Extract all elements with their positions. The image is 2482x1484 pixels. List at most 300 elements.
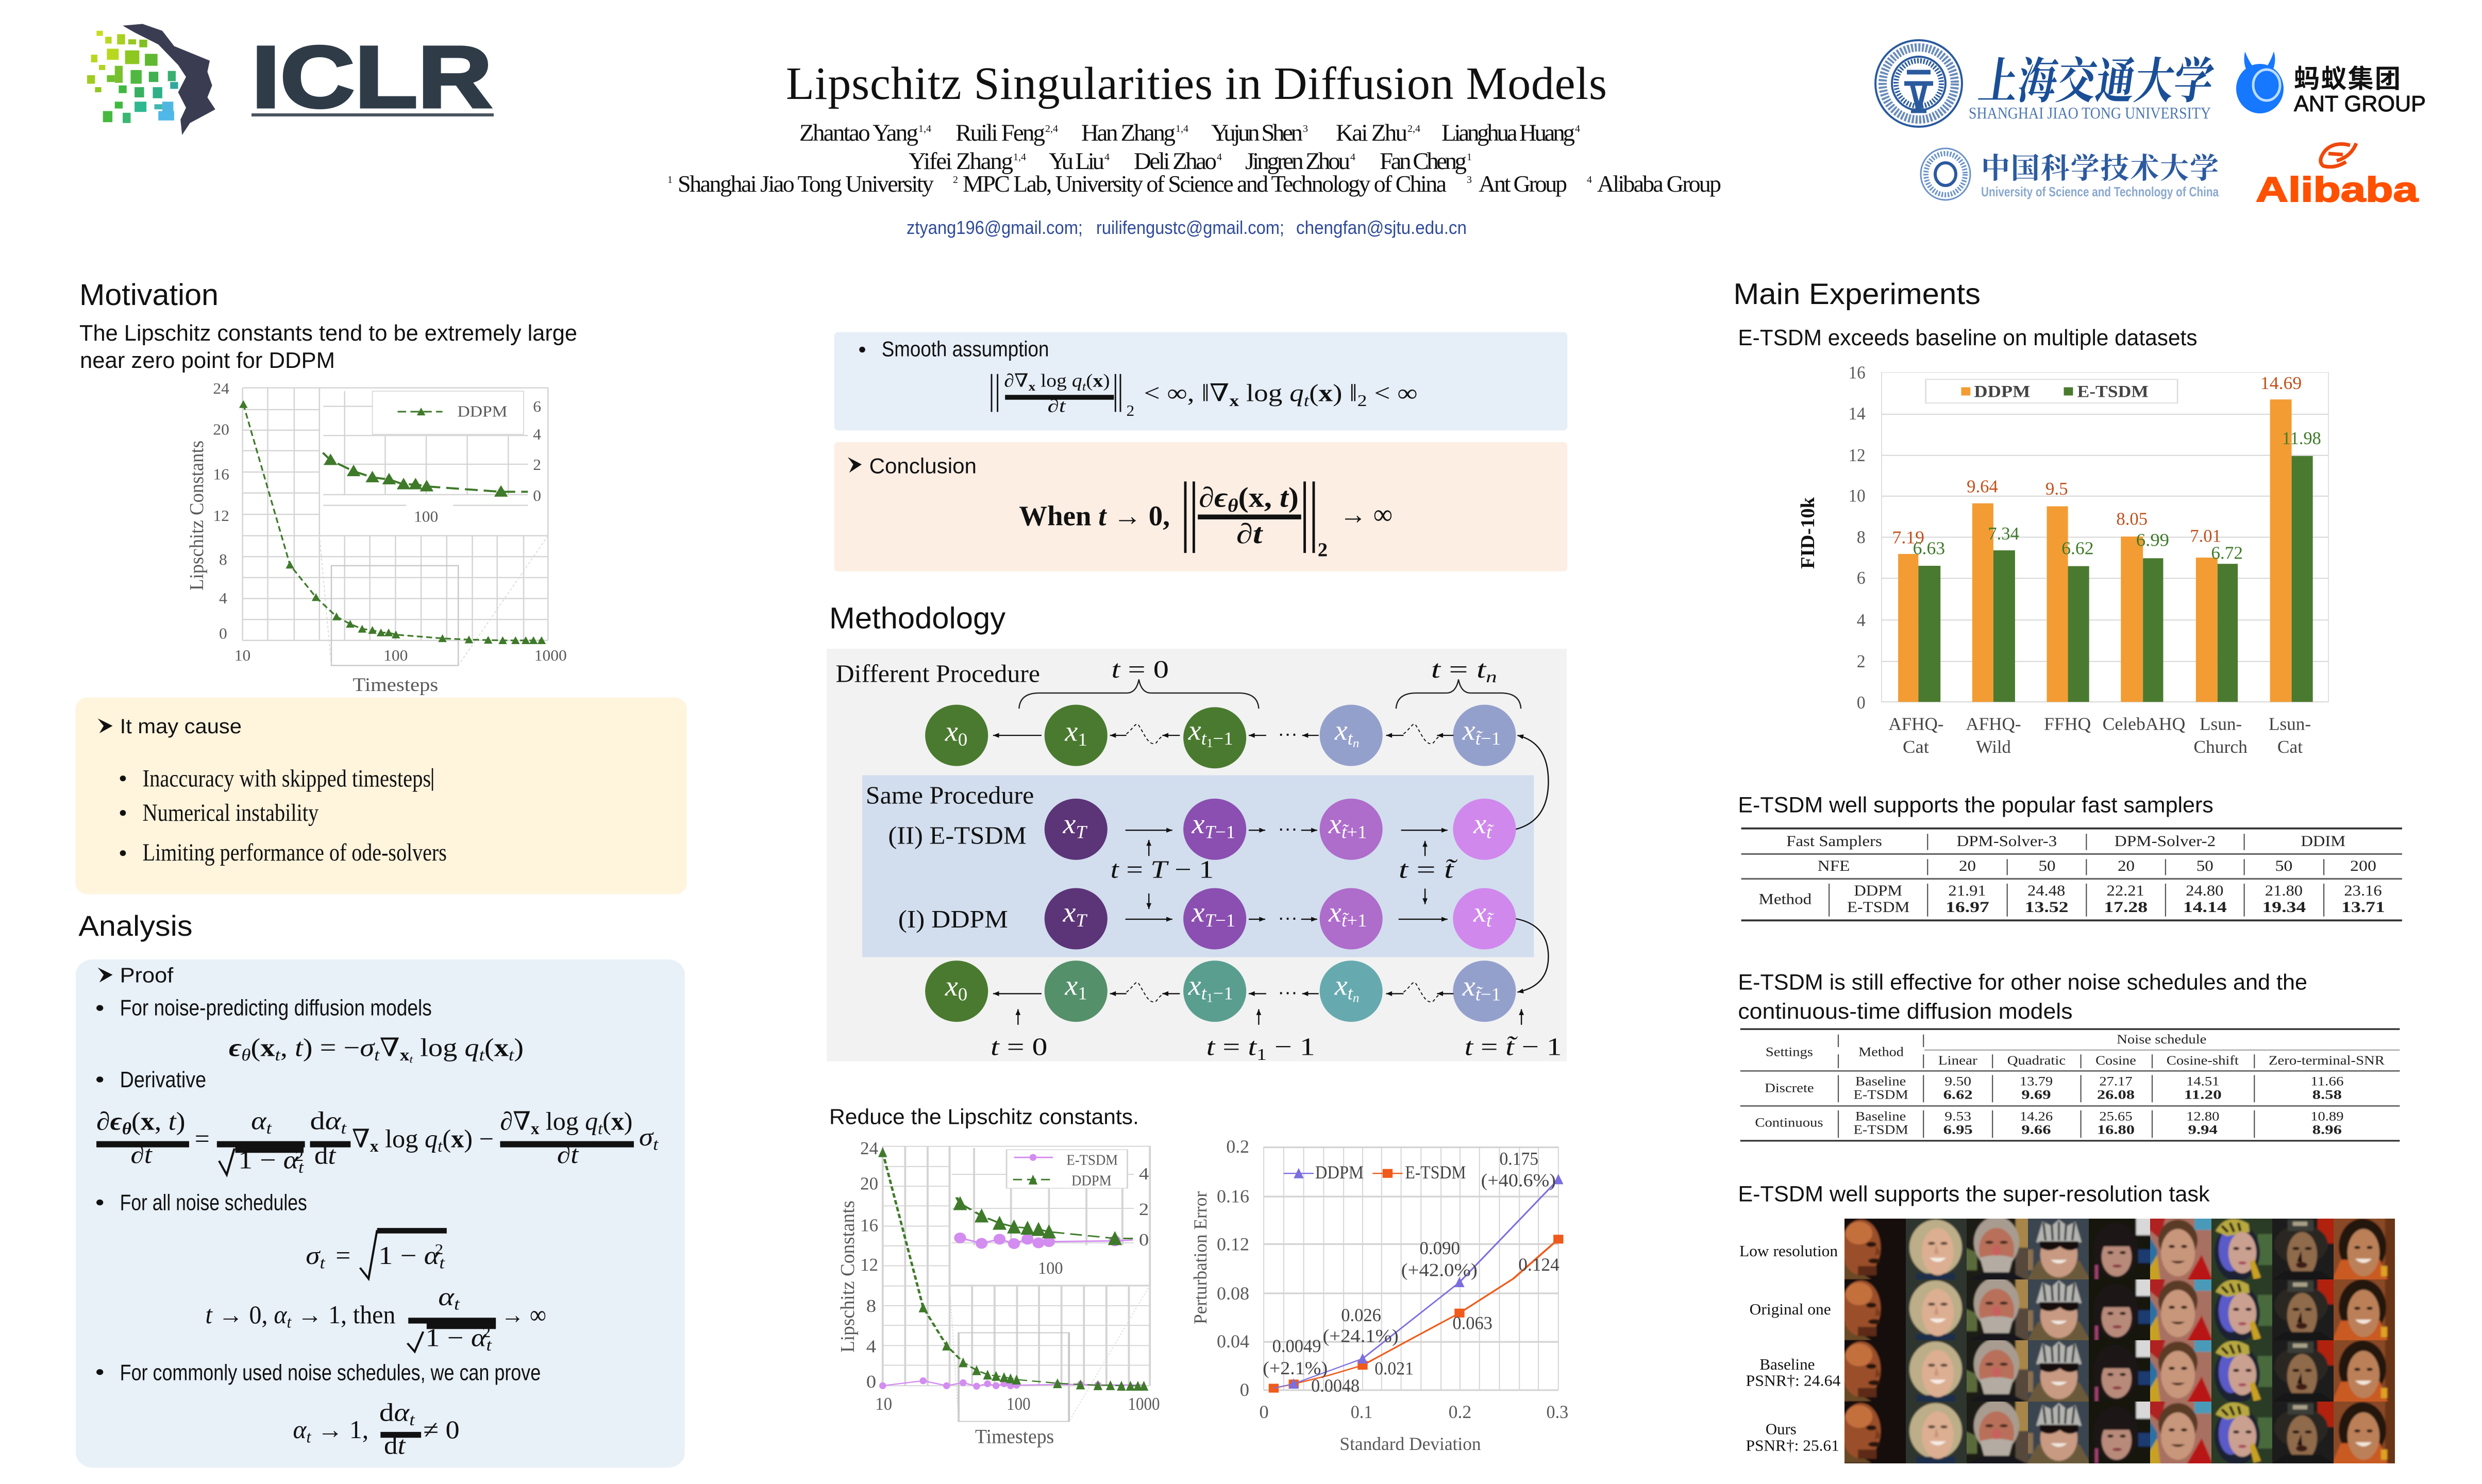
icon: Alibaba swirl xyxy=(2321,143,2356,167)
table: noise schedules: Settings xyxy=(1766,1045,1813,1059)
data labels: (+42.0%) xyxy=(1401,1259,1478,1280)
affiliations: Alibaba Group xyxy=(1597,171,1721,197)
DDPM series xyxy=(243,404,542,640)
panel: smooth assumption: x) ‖ xyxy=(1319,380,1354,407)
authors: 1,4 xyxy=(1176,123,1188,134)
subheading: noise schedules: continuous-time diffusion models xyxy=(1738,999,2073,1023)
authors: 4 xyxy=(1350,151,1355,163)
node row: lower different procedure: n xyxy=(1353,991,1359,1005)
data labels: 0.090 xyxy=(1419,1237,1460,1258)
formula: limit: 1 − α xyxy=(425,1323,487,1352)
proof box xyxy=(76,959,685,1468)
affiliations: 2 xyxy=(953,174,958,185)
y axis ticks: 16 xyxy=(1849,363,1866,383)
x axis categories: Church xyxy=(2193,737,2248,757)
panel: smooth assumption: log xyxy=(1035,370,1072,391)
panel title: It may cause xyxy=(120,715,242,738)
formula: conclusion: t) xyxy=(1280,482,1298,513)
legend xyxy=(373,391,524,434)
legend: DDPM xyxy=(1974,382,2030,401)
table: noise schedules: 9.50 xyxy=(1944,1074,1971,1089)
table: fast samplers: Fast Samplers xyxy=(1786,833,1882,849)
axis labels: 0.2 xyxy=(1226,1136,1249,1157)
panel: smooth assumption: ( xyxy=(1086,370,1093,391)
node row: lower different procedure: x xyxy=(945,971,958,1002)
proof title: Proof xyxy=(120,964,174,987)
formula: noise prediction: t xyxy=(374,1045,380,1065)
diagram labels: 1 xyxy=(1256,1045,1267,1064)
axis labels: 4 xyxy=(219,589,227,607)
x axis categories: Lsun- xyxy=(2269,715,2311,734)
formula: conclusion: When t → 0, xyxy=(1019,501,1170,532)
table: noise schedules: 14.26 xyxy=(2020,1109,2053,1124)
table: noise schedules: 8.58 xyxy=(2312,1088,2342,1102)
y axis title: FID-10k: FID-10k xyxy=(1797,497,1819,569)
x axis categories: Cat xyxy=(1903,737,1929,757)
bullet points: Derivative xyxy=(120,1067,206,1092)
panel: it may cause xyxy=(75,698,687,894)
inset panel: 100 xyxy=(414,508,438,525)
node row: DDPM: −1 xyxy=(1215,910,1235,931)
axis labels xyxy=(213,379,567,696)
panel: smooth assumption: Smooth assumption xyxy=(882,337,1049,361)
authors: 1,4 xyxy=(918,123,931,134)
data labels: (+24.1%) xyxy=(1322,1325,1399,1346)
table: noise schedules: Linear xyxy=(1938,1053,1977,1068)
formula: noise prediction: t) = −σ xyxy=(295,1034,375,1062)
table: noise schedules xyxy=(1740,1029,2400,1141)
formula: noise prediction: , xyxy=(280,1034,295,1062)
node row: upper different procedure: 1 xyxy=(1078,729,1087,750)
formula: derivative: α xyxy=(251,1106,267,1135)
panel: smooth assumption: t xyxy=(1082,380,1086,394)
node row: upper different procedure: t xyxy=(1201,728,1207,749)
emails: chengfan@sjtu.edu.cn xyxy=(1296,217,1467,238)
formula: limit: t xyxy=(454,1294,460,1313)
affiliations: 4 xyxy=(1587,174,1592,185)
authors: Jingren Zhou xyxy=(1245,148,1350,175)
authors: 2,4 xyxy=(1407,123,1420,134)
table: fast samplers: 13.52 xyxy=(2025,899,2068,916)
text block: Lipschitz statement: The Lipschitz constants tend to be extremely large xyxy=(79,321,577,346)
formula: limit: t → 0, α xyxy=(205,1301,290,1329)
chart: perturbation error: 0.124 xyxy=(1518,1254,1559,1275)
formula: conclusion xyxy=(1019,481,1393,561)
node row: lower different procedure: x xyxy=(1065,970,1078,1001)
node row: lower different procedure: 0 xyxy=(958,984,967,1004)
legend xyxy=(1007,1150,1128,1189)
section: reduce the Lipschitz constants xyxy=(829,1105,1568,1454)
data labels: 0.175 xyxy=(1499,1148,1538,1169)
axis labels: 12 xyxy=(213,507,229,525)
y axis ticks: 2 xyxy=(1857,652,1866,671)
formula: noise prediction: θ xyxy=(241,1045,251,1065)
text: 0.3 xyxy=(1547,1401,1568,1422)
bullet points: For commonly used noise schedules, we can prove xyxy=(120,1360,541,1385)
node row: DDPM: t̃ xyxy=(1341,910,1349,931)
table: noise schedules: 6.62 xyxy=(1943,1088,1973,1102)
formula: sigma xyxy=(306,1228,447,1279)
inset panel: 0 xyxy=(533,486,541,504)
formula: derivative: t xyxy=(598,1119,603,1138)
table: noise schedules: 14.51 xyxy=(2186,1074,2219,1089)
legend xyxy=(1926,379,2177,403)
y axis title: Lipschitz constants: Lipschitz Constants xyxy=(837,1201,859,1353)
heading: Methodology: Methodology xyxy=(829,601,1005,635)
x axis categories: Wild xyxy=(1976,737,2011,757)
y axis ticks: 8 xyxy=(1857,528,1866,547)
section: main experiments: Low resolution xyxy=(1739,1242,1838,1260)
formula: conclusion: (x, xyxy=(1238,482,1280,513)
axis labels: 8 xyxy=(219,551,227,568)
table: fast samplers: 13.71 xyxy=(2341,899,2385,916)
formula: noise prediction: ϵ xyxy=(229,1034,242,1062)
panel: conclusion: Conclusion xyxy=(869,454,977,478)
logo underline xyxy=(251,113,494,116)
authors: Deli Zhao xyxy=(1134,148,1217,175)
logo Chinese name: 蚂蚁集团 xyxy=(2294,64,2401,93)
node row: DDPM xyxy=(1045,888,1516,949)
section: reduce the Lipschitz constants: Reduce the Lipschitz constants. xyxy=(829,1105,1139,1129)
formula: noise prediction: t xyxy=(409,1053,413,1066)
node row: lower different procedure: t xyxy=(1348,983,1353,1004)
inset panel: 0 xyxy=(1139,1230,1149,1249)
node row: DDPM: x xyxy=(1192,897,1205,929)
axis labels: 0.16 xyxy=(1217,1186,1249,1207)
table: fast samplers: 16.97 xyxy=(1946,899,1989,916)
authors: 4 xyxy=(1575,123,1580,134)
formula: noise prediction: ∇ xyxy=(379,1034,400,1062)
section: main experiments xyxy=(1733,277,2402,1467)
y axis ticks: 4 xyxy=(1857,611,1866,630)
table: noise schedules: 26.08 xyxy=(2097,1088,2135,1102)
authors xyxy=(799,120,1580,175)
formula: derivative: = xyxy=(195,1125,210,1153)
diagram labels xyxy=(836,655,1562,1064)
y axis ticks: 12 xyxy=(1849,446,1866,465)
same procedure band xyxy=(862,775,1534,957)
data labels: 0.0048 xyxy=(1311,1375,1360,1396)
panel: conclusion xyxy=(834,442,1567,571)
node row: lower different procedure: −1 xyxy=(1213,983,1233,1004)
formula: sigma: 2 xyxy=(435,1241,443,1258)
panel: analysis xyxy=(76,910,685,1468)
table: fast samplers: Method xyxy=(1759,891,1812,907)
bullet list: Numerical instability xyxy=(143,799,319,827)
logo Chinese name: 中国科学技术大学 xyxy=(1981,153,2219,185)
table: noise schedules: 25.65 xyxy=(2099,1109,2133,1124)
table: noise schedules: 10.89 xyxy=(2310,1109,2344,1124)
x axis categories: AFHQ- xyxy=(1966,715,2021,734)
formula: derivative: x xyxy=(531,1119,540,1138)
affiliations: MPC Lab, University of Science and Technology of China xyxy=(963,171,1447,197)
formula: alpha derivative: α xyxy=(293,1415,307,1444)
axis labels: 0.1 xyxy=(1351,1401,1372,1422)
authors: Yifei Zhang xyxy=(909,148,1013,175)
node row: lower different procedure: −1 xyxy=(1481,984,1501,1004)
node row: DDPM: t̃ xyxy=(1486,910,1494,931)
x axis categories: Lsun- xyxy=(2200,715,2242,734)
logo English name: University of Science and Technology of China xyxy=(1981,184,2219,199)
axis labels: 16 xyxy=(860,1216,878,1235)
formula: sigma: σ xyxy=(306,1241,321,1270)
data labels: 0.063 xyxy=(1452,1312,1492,1333)
formula: conclusion: θ xyxy=(1228,495,1238,516)
formula: conclusion: 2 xyxy=(1318,539,1328,561)
table: noise schedules: 27.17 xyxy=(2099,1074,2133,1089)
bullet points xyxy=(96,996,541,1385)
node row: upper different procedure: 0 xyxy=(958,729,967,750)
node row: upper different procedure: 1 xyxy=(1206,736,1213,750)
panel: smooth assumption: log xyxy=(1239,380,1289,407)
table: noise schedules: 6.95 xyxy=(1943,1123,1973,1137)
formula: derivative: ( xyxy=(442,1125,451,1153)
table: fast samplers: 21.91 xyxy=(1948,882,1986,899)
formula: derivative: x) xyxy=(611,1107,634,1136)
formula: limit: 2 xyxy=(482,1324,491,1340)
formula: derivative: ∂ϵ xyxy=(96,1107,123,1136)
E-TSDM series xyxy=(1273,1239,1558,1388)
formula: noise prediction: t xyxy=(509,1045,514,1065)
E-TSDM values: 6.62 xyxy=(2061,539,2094,559)
formula: conclusion: ∂t xyxy=(1236,519,1263,550)
axis labels: 8 xyxy=(866,1296,876,1316)
table: noise schedules: 11.66 xyxy=(2310,1074,2344,1089)
table: fast samplers: 19.34 xyxy=(2262,899,2306,916)
formula: derivative: log xyxy=(539,1107,585,1136)
node row: upper different procedure: x xyxy=(1335,715,1348,746)
axis labels: 0.04 xyxy=(1217,1331,1249,1352)
formula: sigma: t xyxy=(320,1253,326,1272)
node row: upper different procedure: x xyxy=(1463,715,1475,746)
formula: derivative: ∇ xyxy=(352,1125,373,1153)
chart: Lipschitz comparison xyxy=(860,1138,1160,1447)
formula: noise prediction: x xyxy=(400,1045,410,1065)
heading: Motivation: Motivation xyxy=(79,278,219,312)
node row: DDPM: x xyxy=(1329,897,1341,929)
node row: DDPM: T xyxy=(1205,910,1217,931)
node row: E-TSDM: t̃ xyxy=(1486,822,1494,842)
panel: smooth assumption: q xyxy=(1289,380,1304,407)
node row: upper different procedure: −1 xyxy=(1213,728,1233,749)
authors: 3 xyxy=(1303,123,1308,134)
icon: ICLR head xyxy=(87,24,215,135)
E-TSDM values xyxy=(1913,429,2321,563)
table: fast samplers: 50 xyxy=(2038,857,2055,874)
data labels: (+2.1%) xyxy=(1263,1357,1328,1378)
DDPM values: 9.64 xyxy=(1967,477,1998,497)
diagram labels: Different Procedure xyxy=(836,660,1040,687)
table: noise schedules: 9.53 xyxy=(1944,1109,1971,1124)
formula: derivative: ( xyxy=(131,1107,141,1136)
formula: alpha derivative: dα xyxy=(379,1398,410,1427)
axis labels: 1000 xyxy=(534,646,567,664)
table: fast samplers: DPM-Solver-3 xyxy=(1957,833,2057,849)
image grid: super-resolution faces xyxy=(1841,1217,2397,1467)
axis labels: 0 xyxy=(866,1372,876,1392)
panel: smooth assumption: q xyxy=(1072,370,1082,391)
formula: conclusion: ∂ϵ xyxy=(1199,482,1228,513)
formula: derivative: dt xyxy=(314,1141,337,1170)
logo wordmark: ICLR xyxy=(251,28,492,126)
y axis title: Lipschitz Constants xyxy=(186,441,208,591)
affiliations: 1 xyxy=(667,174,673,185)
authors: Kai Zhu xyxy=(1336,120,1407,146)
heading: Main Experiments: Main Experiments xyxy=(1733,277,1981,311)
E-TSDM values: 6.99 xyxy=(2136,531,2169,550)
table: fast samplers: 20 xyxy=(1959,857,1976,874)
table: noise schedules: Cosine xyxy=(2095,1053,2136,1068)
legend xyxy=(1284,1161,1466,1183)
node row: upper different procedure: x xyxy=(1188,715,1201,746)
axis labels: 20 xyxy=(860,1174,878,1193)
axis labels: 24 xyxy=(860,1138,878,1158)
section: main experiments: PSNR†: 25.61 xyxy=(1746,1437,1839,1454)
chart: FID bars xyxy=(1849,363,2328,757)
logo English name: ANT GROUP xyxy=(2294,91,2426,116)
formula: noise prediction: q xyxy=(464,1034,479,1062)
bullet list xyxy=(120,765,447,866)
data labels: 0.026 xyxy=(1341,1304,1381,1325)
node row: lower different procedure: x xyxy=(1463,971,1475,1002)
legend: DDPM xyxy=(1315,1161,1364,1183)
table: noise schedules: 8.96 xyxy=(2312,1123,2342,1137)
arrow bullet xyxy=(98,718,113,733)
node row: E-TSDM: T xyxy=(1076,822,1088,842)
axis labels: 0.2 xyxy=(1449,1401,1471,1422)
affiliations xyxy=(667,171,1721,197)
inset panel: 2 xyxy=(533,456,541,474)
logo wordmark: Alibaba xyxy=(2256,170,2419,209)
chart: DDPM Lipschitz constants xyxy=(186,379,567,696)
legend: DDPM xyxy=(1071,1172,1112,1189)
table: noise schedules: Zero-terminal-SNR xyxy=(2269,1053,2385,1068)
authors: Lianghua Huang xyxy=(1441,120,1575,146)
axis labels: 12 xyxy=(860,1255,878,1275)
node row: upper different procedure: t̃ xyxy=(1475,728,1483,749)
table: fast samplers: 24.80 xyxy=(2186,882,2223,899)
formula: derivative: ∂t xyxy=(130,1140,153,1169)
DDPM series xyxy=(883,1152,1144,1386)
formula: noise prediction: log xyxy=(413,1034,464,1062)
axis labels: 0 xyxy=(1240,1379,1249,1400)
table: noise schedules: E-TSDM xyxy=(1853,1088,1908,1102)
authors: 2,4 xyxy=(1045,123,1058,134)
chart: perturbation error: E-TSDM xyxy=(1405,1161,1466,1183)
table: noise schedules: Discrete xyxy=(1765,1081,1814,1095)
axis labels xyxy=(1217,1136,1568,1454)
bullet points: For noise-predicting diffusion models xyxy=(120,996,432,1020)
formula: sigma: t xyxy=(439,1253,445,1272)
node row: DDPM: x xyxy=(1473,897,1486,929)
logo: Ant Group xyxy=(2236,52,2426,116)
formula: noise prediction: ) xyxy=(514,1034,524,1062)
node row: E-TSDM: T xyxy=(1205,822,1217,842)
diagram labels: t = t̃ − 1 xyxy=(1465,1033,1562,1060)
affiliations: Shanghai Jiao Tong University xyxy=(678,171,934,197)
inset panel xyxy=(950,1146,1150,1285)
table: noise schedules: 9.66 xyxy=(2021,1123,2051,1137)
bullet points: For all noise schedules xyxy=(120,1190,307,1216)
DDPM values: 9.5 xyxy=(2045,480,2068,499)
formula: limit: t xyxy=(287,1312,292,1331)
panels: assumption, conclusion, methodology xyxy=(827,332,1567,1064)
formula: alpha derivative xyxy=(293,1398,460,1459)
DDPM series xyxy=(1273,1179,1558,1388)
panel: smooth assumption: < ∞ xyxy=(1367,380,1418,407)
panel: smooth assumption: < ∞, ‖∇ xyxy=(1144,380,1219,407)
node row: lower different procedure: x xyxy=(1335,970,1348,1001)
ellipsis dots: ··· xyxy=(1278,723,1298,745)
y axis title: perturbation error: Perturbation Error xyxy=(1190,1191,1211,1324)
formula: derivative: t xyxy=(298,1158,304,1177)
formula: derivative: t xyxy=(341,1118,347,1137)
table: noise schedules: 12.80 xyxy=(2186,1109,2219,1124)
axis labels xyxy=(860,1138,1160,1447)
formula: derivative: ∂∇ xyxy=(500,1107,534,1136)
formula: sigma: 1 − α xyxy=(378,1241,440,1270)
ellipsis dots: ··· xyxy=(1278,981,1298,1003)
data labels xyxy=(1263,1148,1559,1396)
node row: lower different procedure: 1 xyxy=(1206,991,1213,1005)
axis labels: 10 xyxy=(234,646,250,664)
axis labels: 100 xyxy=(383,646,408,664)
y axis ticks xyxy=(1849,363,1866,713)
diagram labels: n xyxy=(1486,668,1497,686)
diagram labels: t = 0 xyxy=(1112,655,1169,683)
table: noise schedules: Method xyxy=(1858,1045,1904,1059)
E-TSDM values: 6.72 xyxy=(2211,544,2243,563)
axis labels: 0 xyxy=(219,625,227,643)
authors: Ruili Feng xyxy=(955,120,1045,146)
table: noise schedules: Continuous xyxy=(1755,1116,1823,1129)
diagram labels: − 1 xyxy=(1267,1033,1315,1060)
title: Lipschitz Singularities in Diffusion Models xyxy=(786,58,1607,109)
panel: motivation xyxy=(75,278,687,894)
table: fast samplers: NFE xyxy=(1818,857,1850,874)
table: noise schedules: 16.80 xyxy=(2097,1123,2135,1137)
diagram: methodology xyxy=(827,649,1567,1064)
DDPM values: 7.19 xyxy=(1892,528,1924,548)
ellipsis dots: ··· xyxy=(1278,907,1298,929)
axis labels: 4 xyxy=(866,1337,876,1356)
inset panel: 4 xyxy=(1139,1164,1149,1184)
node row: lower different procedure: t̃ xyxy=(1475,984,1483,1004)
DDPM values xyxy=(1892,374,2302,548)
authors: 1,4 xyxy=(1013,151,1026,163)
panel: smooth assumption: ( xyxy=(1309,380,1319,407)
formula: derivative: ∂t xyxy=(557,1140,579,1169)
table: fast samplers: 14.14 xyxy=(2183,899,2227,916)
logo: Shanghai Jiao Tong University xyxy=(1875,40,2217,127)
formula: derivative: x xyxy=(370,1137,379,1156)
axis labels: Timesteps xyxy=(975,1425,1054,1447)
node row: lower different procedure: 1 xyxy=(1078,983,1087,1004)
E-TSDM values: 7.34 xyxy=(1988,524,2019,544)
panel: smooth assumption: ∂t xyxy=(1048,396,1066,416)
axis labels: 16 xyxy=(213,465,229,483)
authors: Fan Cheng xyxy=(1380,148,1467,175)
node row: upper different procedure: n xyxy=(1353,736,1359,750)
table: fast samplers: DPM-Solver-2 xyxy=(2115,833,2216,849)
node row: E-TSDM: x xyxy=(1192,808,1205,840)
zoom box xyxy=(950,1285,1150,1422)
table: fast samplers: DDPM xyxy=(1854,882,1902,899)
formula: alpha derivative: t xyxy=(409,1410,415,1429)
authors: Yujun Shen xyxy=(1211,120,1303,146)
node row: E-TSDM: x xyxy=(1473,808,1486,840)
formula: derivative: 2 xyxy=(295,1148,304,1164)
